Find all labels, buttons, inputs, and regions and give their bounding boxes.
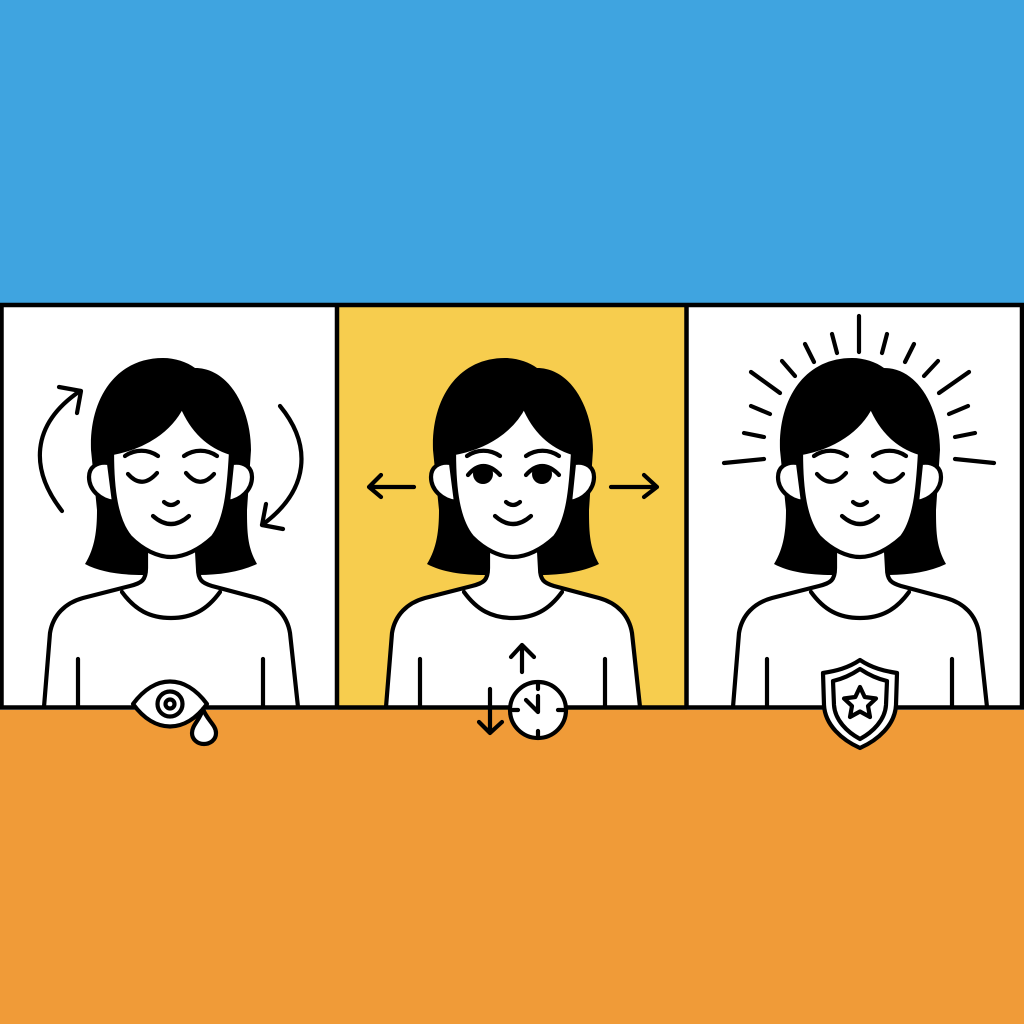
icon: eye with tear	[133, 682, 216, 744]
panel: centre, yellow with directional arrows	[338, 303, 687, 710]
icon: circular arrow going up, left panel	[40, 387, 81, 511]
icon: shield with star	[823, 660, 897, 748]
icon: left arrow, centre panel	[369, 475, 414, 497]
blue top band	[0, 0, 1024, 303]
orange bottom band	[0, 709, 1024, 1024]
icon: up arrow	[511, 645, 534, 672]
panel: left, white with rotation arrows	[0, 303, 338, 710]
figure: calm woman with closed eyes, left panel	[44, 358, 298, 707]
icon: clock	[510, 682, 566, 738]
icon: down arrow	[479, 689, 502, 733]
figure: calm woman with closed eyes, right panel	[733, 358, 987, 707]
panel: right, white with radiating lines	[687, 303, 1024, 710]
icon: right arrow, centre panel	[611, 475, 657, 497]
figure: woman with open eyes, centre panel	[386, 358, 640, 707]
icon: radiating light rays	[724, 316, 994, 463]
panel frame lines	[0, 303, 1024, 708]
icon: circular arrow going down, left panel	[262, 406, 301, 529]
